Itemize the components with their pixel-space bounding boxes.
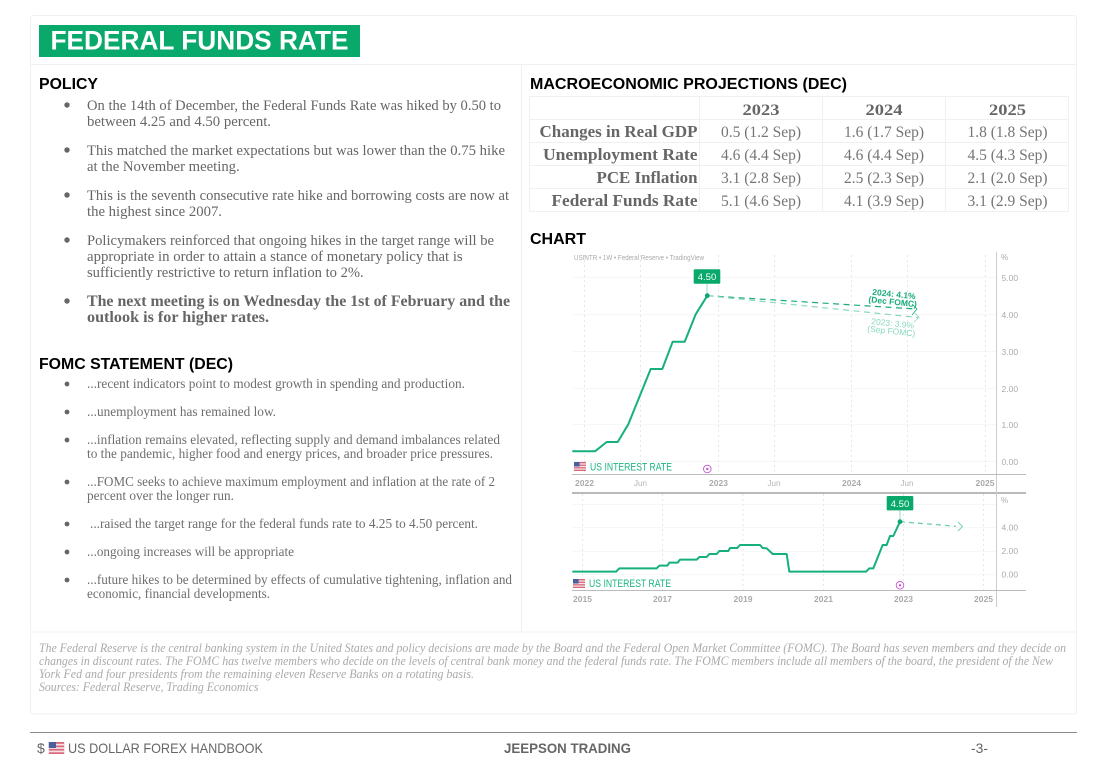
footnote: changes in discount rates. The FOMC has twelve members who decide on the levels of central bank money and the federal funds rate. The FOMC members include all members of the board, the president of the New: [39, 654, 1054, 668]
projections table: 0.5 (1.2 Sep): [721, 124, 801, 141]
chart source caption: USINTR • 1W • Federal Reserve • TradingView: [574, 255, 705, 262]
projection: Dec FOMC: [707, 296, 917, 315]
annotation: Dec FOMC: 2024: 4.1%: [872, 287, 917, 301]
projections table: 3.1 (2.9 Sep): [967, 193, 1048, 210]
annotation: Dec FOMC: (Dec FOMC): [868, 294, 918, 309]
bullet list: FOMC statement: ...unemployment has remained low.: [87, 404, 276, 419]
bullet list: policy: [64, 98, 510, 326]
projections table: 2.5 (2.3 Sep): [844, 170, 924, 187]
footer: [30, 732, 1077, 756]
x axis labels: Jun: [634, 479, 647, 488]
panel: FOMC statement: [39, 356, 512, 601]
y axis labels: 2.00: [1002, 384, 1018, 394]
bullet list: policy: between 4.25 and 4.50 percent.: [87, 114, 271, 130]
projections table: 4.6 (4.4 Sep): [721, 147, 801, 164]
footer: page number: -3-: [971, 740, 988, 756]
bullet list: FOMC statement: ...future hikes to be determined by effects of cumulative tightening, inflation and: [87, 572, 512, 587]
x axis labels: 2025: [974, 594, 993, 604]
bullet list: policy: appropriate in order to attain a stance of monetary policy that is: [87, 249, 463, 265]
x axis labels: 2023: [709, 478, 728, 488]
y axis labels: 0.00: [1002, 457, 1018, 467]
y axis labels: 1.00: [1002, 420, 1018, 430]
y axis labels: 2.00: [1002, 546, 1018, 556]
projection: Sep FOMC: [707, 296, 919, 322]
bullet list: FOMC statement: ...ongoing increases will be appropriate: [87, 544, 294, 559]
bullet list: FOMC statement: ...recent indicators point to modest growth in spending and production.: [87, 376, 465, 391]
x axis labels: 2017: [653, 594, 672, 604]
y axis labels: 5.00: [1002, 273, 1018, 283]
annotation: Sep FOMC: [867, 316, 916, 339]
chart legend: US INTEREST RATE: [589, 578, 671, 590]
projection arrow: [900, 522, 962, 531]
projections table: Changes in Real GDP: [540, 122, 698, 141]
x axis labels: Jun: [901, 479, 913, 488]
projections table: Federal Funds Rate: [552, 191, 698, 210]
bullet list: FOMC statement: percent over the longer run.: [87, 488, 234, 503]
annotation: Sep FOMC: 2023: 3.9%: [871, 316, 915, 331]
projections table: 2023: [742, 102, 780, 119]
line: actual rate: [572, 296, 707, 451]
x axis labels: 2023: [894, 594, 913, 604]
bullet list: policy: This is the seventh consecutive rate hike and borrowing costs are now at: [87, 188, 510, 204]
bullet list: policy: Policymakers reinforced that ongoing hikes in the target range will be: [87, 233, 494, 249]
footnote: [39, 641, 1066, 694]
footer: brand: JEEPSON TRADING: [504, 740, 631, 756]
current value marker: 4.50: [891, 499, 909, 510]
projections table: 1.6 (1.7 Sep): [844, 124, 924, 141]
x axis labels: [575, 478, 995, 488]
y axis labels: 0.00: [1002, 570, 1018, 580]
footnote: The Federal Reserve is the central banking system in the United States and policy decisions are made by the Board and the Federal Open Market Committee (FOMC). The Board has seven members and they decide on: [39, 641, 1066, 655]
line: actual rate: [572, 522, 900, 572]
y axis labels: %: [1001, 253, 1008, 262]
projections table: 1.8 (1.8 Sep): [967, 124, 1048, 141]
projections table: [530, 96, 1068, 212]
panel: macroeconomic projections: [530, 76, 1068, 212]
bullet list: policy: sufficiently restrictive to return inflation to 2%.: [87, 265, 364, 281]
bullet list: FOMC statement: ...raised the target range for the federal funds rate to 4.25 to 4.50 percent.: [90, 516, 478, 531]
chart legend: [573, 578, 671, 590]
projections table: Unemployment Rate: [543, 145, 698, 164]
bullet list: policy: This matched the market expectations but was lower than the 0.75 hike: [87, 143, 505, 159]
chart legend: [574, 462, 672, 474]
projections table: 4.5 (4.3 Sep): [967, 147, 1048, 164]
bullet list: policy: The next meeting is on Wednesday the 1st of February and the: [87, 293, 510, 310]
y axis labels: [1001, 253, 1018, 467]
footnote: Sources: Federal Reserve, Trading Economics: [39, 680, 259, 694]
x axis labels: 2021: [814, 594, 833, 604]
bullet list: FOMC statement: ...inflation remains elevated, reflecting supply and demand imbalances related: [87, 432, 500, 447]
projections table: 4.1 (3.9 Sep): [844, 193, 924, 210]
bullet list: FOMC statement: to the pandemic, higher food and energy prices, and broader price pressures.: [87, 446, 493, 461]
projections table: 2024: [866, 102, 902, 119]
heading: chart: CHART: [530, 231, 586, 248]
y axis labels: 3.00: [1002, 347, 1018, 357]
bullet list: FOMC statement: ...FOMC seeks to achieve maximum employment and inflation at the rate of 2: [87, 474, 495, 489]
x axis labels: 2025: [976, 478, 995, 488]
y axis labels: 4.00: [1002, 522, 1018, 532]
x axis labels: 2022: [575, 478, 594, 488]
chart legend: US INTEREST RATE: [590, 462, 672, 474]
footer: handbook name: $: [37, 740, 45, 756]
icon: event marker: [704, 465, 711, 473]
chart: US interest rate 2015-2025: [572, 490, 1026, 607]
bullet list: policy: at the November meeting.: [87, 159, 240, 175]
projections table: 4.6 (4.4 Sep): [844, 147, 924, 164]
heading: macroeconomic projections: MACROECONOMIC PROJECTIONS (DEC): [530, 76, 847, 93]
projections table: PCE Inflation: [596, 168, 698, 187]
y axis labels: [1001, 496, 1018, 580]
x axis labels: 2024: [842, 478, 861, 488]
current value marker: [694, 269, 720, 298]
annotation: Sep FOMC: (Sep FOMC): [867, 324, 916, 339]
chart: US interest rate 2022-2025: [572, 252, 1026, 490]
title: FEDERAL FUNDS RATE: [50, 26, 348, 56]
bullet list: policy: outlook is for higher rates.: [87, 309, 269, 326]
projections table: 2025: [989, 102, 1026, 119]
x axis labels: 2019: [734, 594, 753, 604]
current value marker: 4.50: [698, 272, 716, 283]
x axis labels: 2015: [573, 594, 592, 604]
icon: event marker: [896, 582, 904, 589]
heading: policy: POLICY: [39, 76, 98, 93]
current value marker: [887, 496, 913, 524]
bullet list: FOMC statement: economic, financial developments.: [87, 586, 270, 601]
x axis labels: Jun: [768, 479, 780, 488]
bullet list: FOMC statement: [65, 376, 512, 601]
projections table: 2.1 (2.0 Sep): [967, 170, 1048, 187]
projections table: 3.1 (2.8 Sep): [721, 170, 801, 187]
x axis labels: [573, 594, 993, 604]
bullet list: policy: On the 14th of December, the Federal Funds Rate was hiked by 0.50 to: [87, 98, 501, 114]
footnote: York Fed and four presidents from the remaining eleven Reserve Banks on a rotating basis.: [39, 667, 474, 681]
annotation: Dec FOMC: [868, 287, 918, 309]
y axis labels: 4.00: [1002, 310, 1018, 320]
bullet list: policy: the highest since 2007.: [87, 204, 222, 220]
y axis labels: %: [1001, 496, 1008, 505]
heading: FOMC statement: FOMC STATEMENT (DEC): [39, 356, 233, 373]
footer: handbook name: US DOLLAR FOREX HANDBOOK: [68, 740, 264, 756]
panel: policy: [39, 76, 510, 326]
projections table: 5.1 (4.6 Sep): [721, 193, 801, 210]
